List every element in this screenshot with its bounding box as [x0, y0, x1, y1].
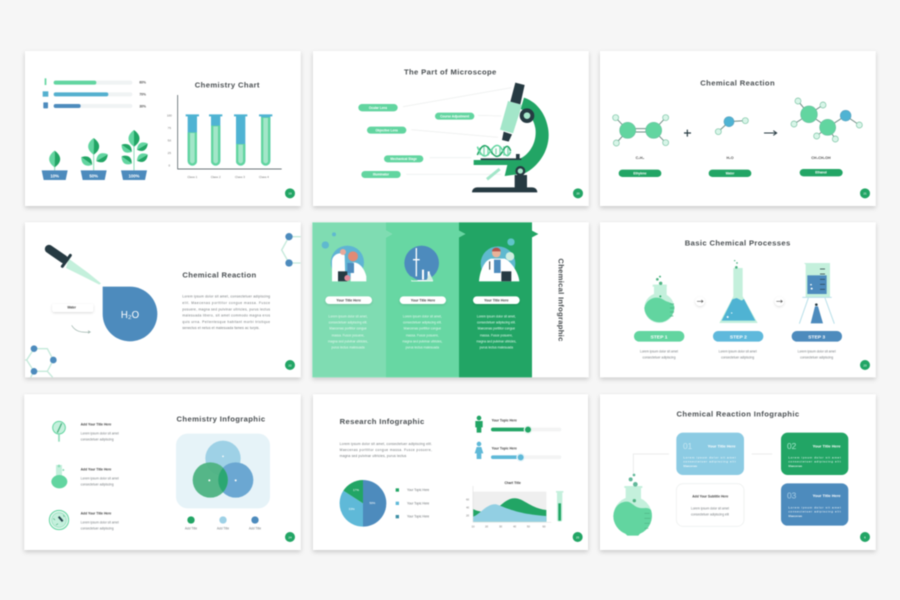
molecule: water [715, 117, 748, 135]
slide: Chemistry Infographic venn [24, 394, 301, 550]
column 3 text [476, 315, 516, 349]
vertical title: Chemical Infographic [556, 258, 565, 342]
box 03: consectetuer adipiscing elit [788, 510, 841, 514]
box 03: Lorem ipsum dolor sit amet [788, 505, 841, 509]
area chart [466, 481, 551, 528]
step descriptions: consectetuer adipiscing [721, 356, 754, 360]
box 03: Your Title Here [813, 493, 841, 498]
column 3 background [459, 222, 538, 377]
page number: 24 [288, 535, 292, 539]
test tube bar chart: 50 [168, 139, 171, 143]
figure: female bar: Your Topic Here [492, 447, 517, 451]
column 1 background [312, 222, 392, 377]
step pills: STEP 3 [808, 334, 825, 340]
paragraph: malesuada libero, sit amet commodo magna eros [182, 314, 270, 318]
icon: petri dish [49, 510, 69, 530]
box 03: 03 [787, 491, 797, 501]
plant pots [42, 130, 150, 180]
icon: magnifier [53, 421, 65, 442]
column 2 text: Lorem ipsum dolor sit amet, [403, 315, 442, 319]
water label [52, 304, 93, 312]
item 3 text [81, 512, 119, 531]
slide title: The Part of Microscope [404, 67, 497, 76]
item 2 text [81, 468, 119, 487]
area chart: 20 [466, 514, 470, 518]
area chart: 20 [485, 524, 489, 528]
area chart: 10 [472, 524, 475, 528]
pie legend: Your Topic Here [407, 515, 430, 519]
title pills: Your Title Here [484, 299, 509, 303]
slide title: Chemical Reaction [700, 78, 775, 87]
paragraph: posuere, magna sed pulvinar ultricies, purus lectus [182, 307, 270, 311]
plus sign [684, 130, 691, 137]
test tube bar chart: Class 3 [235, 175, 245, 179]
slide: Chemical Reaction Infographic [600, 394, 876, 550]
paragraph: senectus et netus et malesuada fames ac turpis. [182, 326, 260, 330]
part labels: Objective Lens [375, 128, 398, 132]
part labels: Mechanical Stage [390, 157, 417, 161]
column 3 text: magna sed pulvinar ultricies, [476, 339, 516, 343]
part labels: Course Adjustment [440, 114, 470, 118]
column 1 text: massa. Fusce posuere, [332, 333, 365, 337]
item 2 text: consectetuer adipiscing [81, 483, 114, 487]
page number: 19 [288, 192, 292, 196]
test tube bar chart: 75 [168, 126, 171, 130]
water label: Water [67, 306, 77, 310]
card background [313, 51, 589, 206]
column 2 text: consectetuer adipiscing elit. [403, 321, 442, 325]
slide: Chemical Infographic columns [312, 222, 589, 377]
column 1 text: consectetuer adipiscing elit. [329, 321, 368, 325]
card background [600, 394, 876, 550]
paragraph [340, 442, 432, 458]
venn legend: Add Title [217, 527, 229, 531]
page number [285, 532, 295, 542]
illustration: lab glassware [404, 246, 439, 281]
test tube bar chart: 25 [168, 151, 171, 155]
figure: male bar [475, 416, 561, 434]
slide title: Basic Chemical Processes [685, 239, 791, 248]
water drop [103, 287, 157, 341]
arrow 2 [775, 297, 784, 306]
dropper [49, 249, 101, 285]
paragraph: Lorem ipsum dolor sit amet, consectetuer adipiscing [182, 295, 270, 299]
area chart: 30 [499, 524, 503, 528]
page number [573, 188, 583, 198]
arrow 1 [695, 297, 705, 306]
slide: The Part of Microscope [313, 51, 589, 206]
beaker on stand [799, 263, 834, 324]
flask illustration [613, 474, 652, 536]
card background [312, 222, 589, 377]
column 2 text: purus lectus malesuada [406, 345, 439, 349]
column 1 text: purus lectus malesuada [331, 345, 365, 349]
illustration: researcher [479, 238, 519, 281]
page number: 20 [576, 192, 580, 196]
test tube bar chart: Class 1 [187, 175, 198, 179]
formula labels [636, 156, 831, 160]
item 2 text: Lorem ipsum dolor sit amet [81, 477, 119, 481]
plant pots: 50% [89, 173, 98, 178]
area chart: 50 [527, 524, 530, 528]
box 01: Lorem ipsum dolor sit amet [683, 455, 736, 459]
column 2 background [386, 222, 465, 377]
slide: Chemical Reaction molecules [600, 51, 876, 206]
box 02: 02 [787, 441, 797, 451]
box 02: consectetuer adipiscing elit [788, 460, 841, 464]
item 2 text: Add Your Title Here [81, 468, 112, 472]
paragraph: Maecenas porttitor congue massa. Fusce posuere, [340, 448, 432, 452]
compound pills [619, 169, 843, 177]
pie chart: 33% [349, 507, 355, 511]
slide: Chemical Reaction H2O [25, 222, 301, 377]
box 03 [781, 483, 848, 526]
column 1 text: magna sed pulvinar ultricies, [328, 339, 368, 343]
test tube bar chart: Class 4 [259, 175, 269, 179]
venn diagram panel [176, 434, 270, 508]
slide: Chemistry Chart [25, 51, 301, 206]
card background [25, 222, 301, 377]
page number [573, 532, 583, 542]
pie chart: 17% [353, 488, 359, 492]
leader lines [403, 88, 511, 174]
step descriptions: Lorem ipsum dolor sit amet [719, 350, 757, 354]
subtitle box: Lorem ipsum dolor sit amet [691, 506, 729, 510]
formula labels: C₂H₄ [636, 156, 645, 160]
column 3 text: consectetuer adipiscing elit. [477, 321, 516, 325]
part labels [358, 104, 474, 178]
page number: 25 [576, 535, 580, 539]
card background [600, 51, 876, 206]
formula labels: H₂O [726, 156, 734, 160]
card background [25, 51, 301, 206]
column 3 text: purus lectus malesuada [480, 345, 513, 349]
item 1 text [81, 422, 119, 441]
box 02: Maecenas [788, 464, 803, 468]
venn legend [185, 516, 261, 531]
progress bars: 60% [139, 80, 146, 84]
compound pills: Ethylene [633, 171, 647, 175]
figure: male bar: Your Topic Here [492, 419, 517, 423]
step descriptions: Lorem ipsum dolor sit amet [798, 350, 836, 354]
venn legend: Add Title [249, 527, 261, 531]
page number: 21 [863, 192, 867, 196]
progress bars [43, 78, 146, 108]
box 01: consectetuer adipiscing elit [683, 460, 736, 464]
test tube bar chart [167, 95, 282, 179]
molecule: ethylene [613, 115, 669, 146]
title pills: Your Title Here [336, 299, 361, 303]
column 3 text: Lorem ipsum dolor sit amet, [477, 315, 516, 319]
column 2 text [402, 315, 442, 349]
slide: Research Infographic [313, 394, 588, 550]
step pills: STEP 2 [730, 334, 747, 340]
progress bars: 30% [139, 104, 146, 108]
paragraph: elit. Maecenas porttitor congue massa. Fusce [182, 301, 270, 305]
chart test tube [556, 491, 563, 522]
card background [313, 394, 588, 550]
slide title: Chemical Reaction Infographic [677, 410, 800, 419]
page number [860, 360, 870, 370]
conical flask [719, 260, 758, 323]
paragraph: magna sed pulvinar ultricies, purus lectus [340, 454, 407, 458]
test tube bar chart: 100 [167, 114, 172, 118]
step pills [634, 331, 842, 342]
compound pills: Water [726, 171, 735, 175]
title pills [325, 296, 520, 304]
column 3 text: Maecenas porttitor congue [478, 327, 515, 331]
plant pots: 10% [50, 173, 59, 178]
column 2 text: magna sed pulvinar ultricies, [402, 339, 442, 343]
microscope illustration [472, 83, 549, 192]
water drop: H₂O [121, 310, 140, 321]
box 01: Your Title Here [708, 443, 736, 448]
chart title: Chemistry Chart [195, 80, 260, 89]
heading: Research Infographic [340, 417, 425, 426]
pie chart [340, 480, 386, 527]
step descriptions [640, 350, 836, 360]
page number [860, 532, 870, 542]
page number [285, 360, 295, 370]
pie legend: Your Topic Here [407, 501, 430, 505]
item 3 text: Add Your Title Here [81, 512, 112, 516]
paragraph: quis urna. Pellentesque habitant morbi tristique [182, 320, 270, 324]
icon: flask [51, 465, 67, 488]
test tube bar chart: 0 [168, 163, 170, 167]
box 01: Maecenas [683, 464, 698, 468]
pie legend [396, 488, 430, 519]
column 3 text: massa. Fusce posuere, [480, 333, 513, 337]
column 2 text: Maecenas porttitor congue [404, 327, 441, 331]
heading: Chemical Reaction [182, 271, 257, 280]
molecule: ethanol [791, 98, 862, 142]
round flask [644, 276, 674, 323]
card background [600, 222, 876, 377]
area chart: 40 [466, 505, 470, 509]
illustration: scientists [322, 232, 366, 281]
item 1 text: Lorem ipsum dolor sit amet [81, 431, 119, 435]
box 02: Your Title Here [813, 443, 841, 448]
item 3 text: consectetuer adipiscing [81, 527, 114, 531]
hexagon decoration bottom left [25, 345, 57, 377]
box 01: 01 [683, 441, 693, 451]
card background [24, 394, 301, 550]
box 02: Lorem ipsum dolor sit amet [788, 455, 841, 459]
box 02 [781, 433, 848, 475]
page number: 22 [288, 363, 292, 367]
column 1 text: Maecenas porttitor congue [329, 327, 367, 331]
connector lines [633, 454, 772, 473]
curved arrow [72, 325, 90, 333]
step pills: STEP 1 [650, 334, 668, 340]
page number [860, 188, 870, 198]
venn legend: Add Title [185, 527, 197, 531]
subtitle box [676, 484, 744, 526]
plant pots: 100% [128, 173, 140, 178]
page number [285, 188, 295, 198]
column 2 text: massa. Fusce posuere, [406, 333, 439, 337]
part labels: Illuminator [373, 173, 390, 177]
item 3 text: Lorem ipsum dolor sit amet [81, 521, 119, 525]
step descriptions: Lorem ipsum dolor sit amet [640, 350, 678, 354]
progress bars: 70% [139, 92, 146, 96]
test tube bar chart: Class 2 [211, 175, 221, 179]
page number: 23 [863, 363, 867, 367]
item 1 text: consectetuer adipiscing [81, 437, 114, 441]
hexagon decoration top right [282, 233, 301, 267]
column 1 text [328, 315, 368, 349]
step descriptions: consectetuer adipiscing [800, 356, 833, 360]
compound pills: Ethanol [815, 171, 827, 175]
pie legend: Your Topic Here [407, 488, 430, 492]
item 1 text: Add Your Title Here [81, 422, 112, 426]
slide title: Chemistry Infographic [177, 415, 266, 424]
area chart: 40 [513, 524, 517, 528]
paragraph [182, 295, 270, 330]
box 01 [676, 433, 744, 475]
subtitle box: consectetuer adipiscing elit [691, 512, 729, 516]
figure: female bar [475, 442, 561, 462]
area chart: 60 [543, 524, 546, 528]
step descriptions: consectetuer adipiscing [642, 356, 676, 360]
slide: Basic Chemical Processes [600, 222, 876, 377]
title pills: Your Title Here [411, 299, 435, 303]
pie chart: 50% [369, 501, 376, 505]
area chart: Chart Title [504, 481, 521, 485]
formula labels: CH₃CH₂OH [811, 156, 831, 160]
area chart: 60 [466, 498, 470, 502]
column 1 text: Lorem ipsum dolor sit amet, [329, 315, 368, 319]
reaction arrow [764, 131, 777, 135]
page number: 6 [864, 535, 866, 539]
box 03: Maecenas [788, 514, 803, 518]
subtitle box: Add Your Subtitle Here [692, 495, 729, 499]
paragraph: Lorem ipsum dolor sit amet, consectetuer adipiscing elit. [340, 442, 432, 446]
part labels: Ocular Lens [369, 106, 387, 110]
